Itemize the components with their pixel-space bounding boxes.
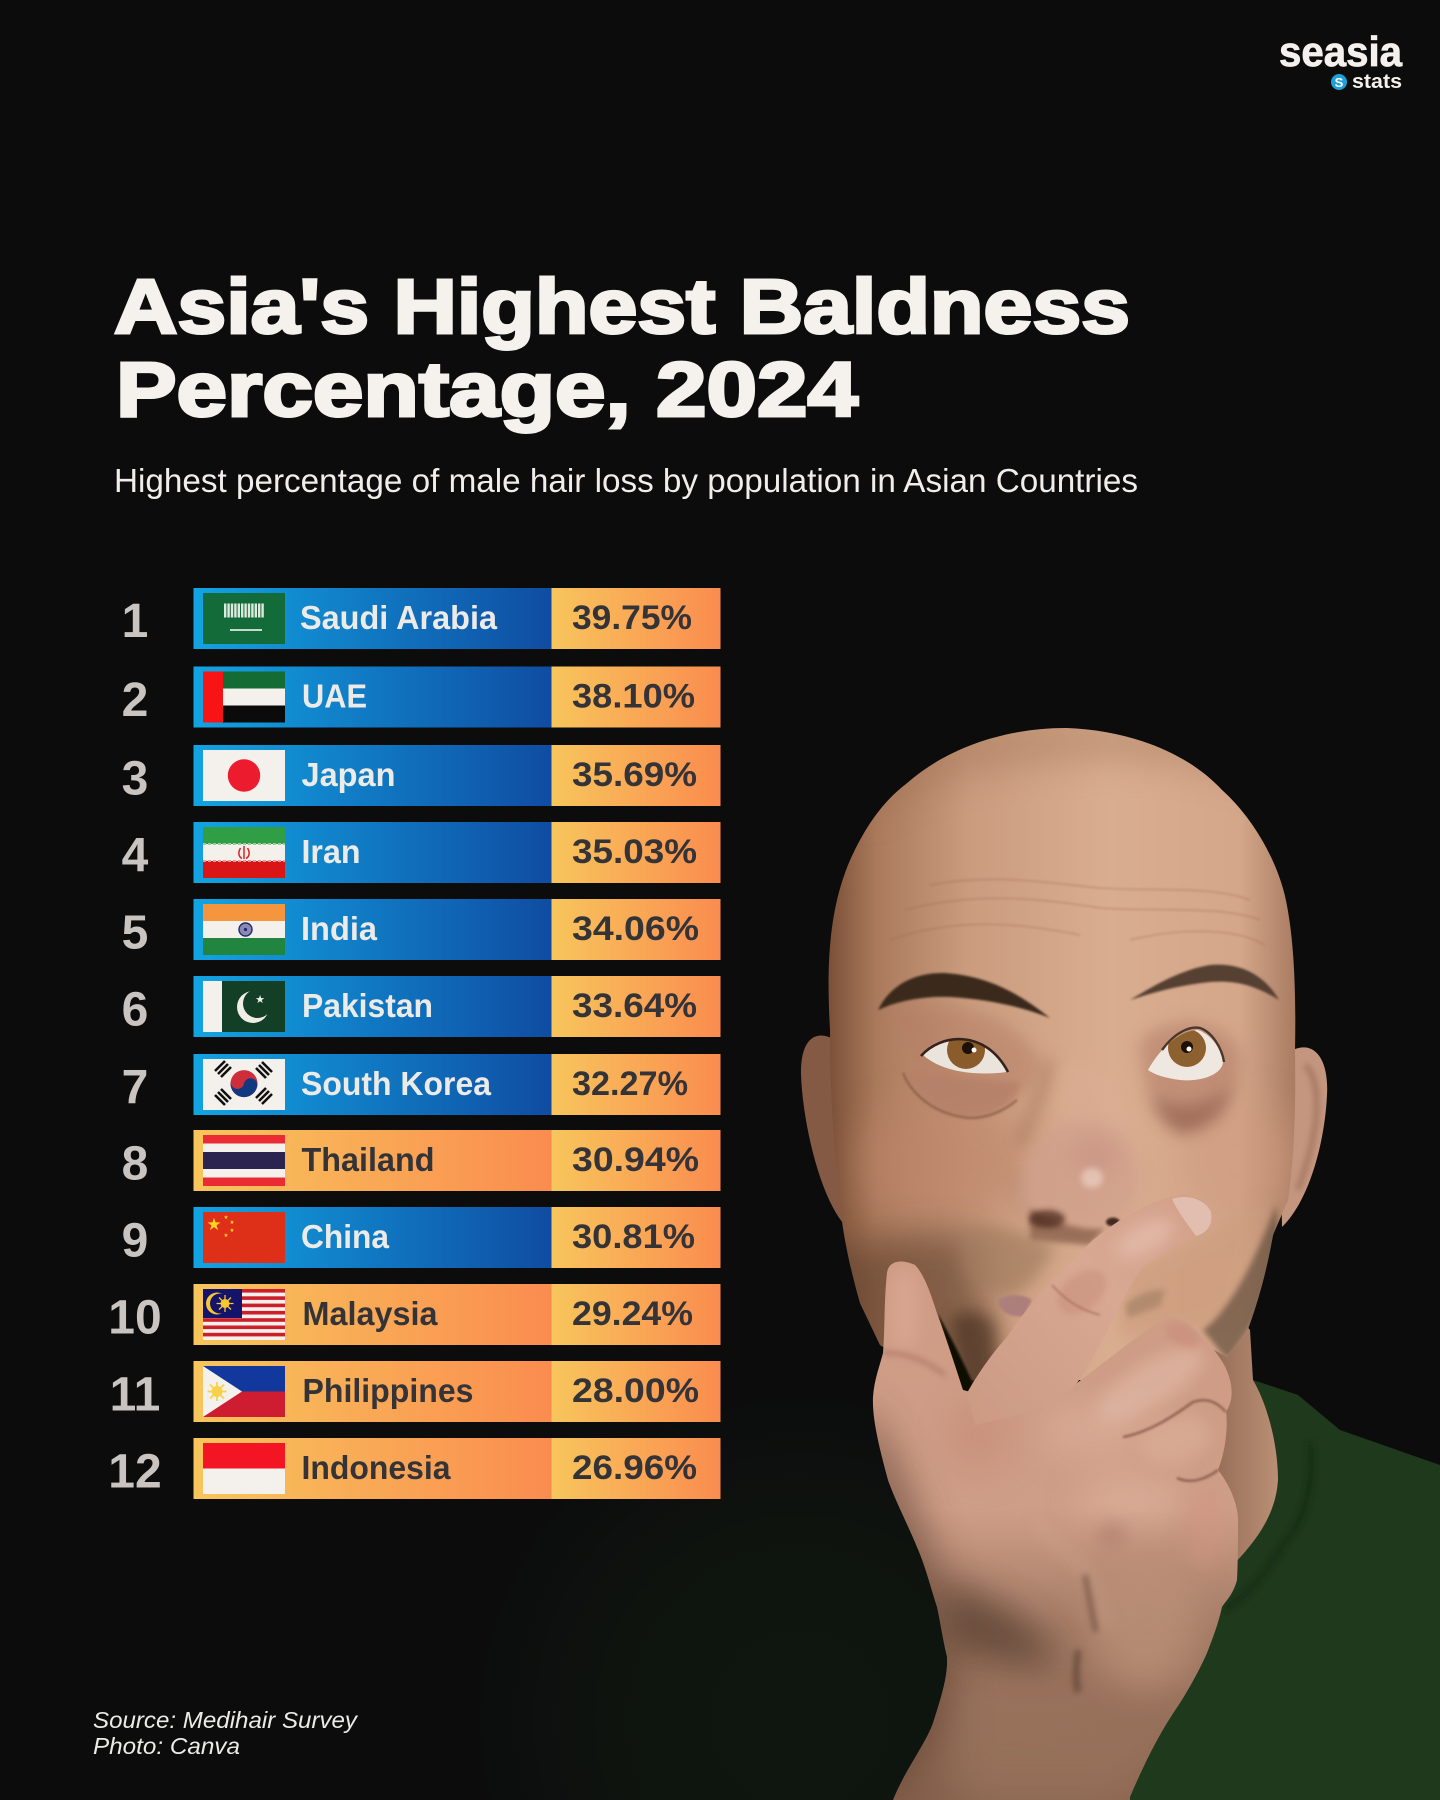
chin shadow stubble [950,1311,1000,1400]
row 11: Philippines: 11 [110,1368,160,1422]
row 3: Japan: Japan [302,756,396,793]
row 12: Indonesia: 26.96% [572,1449,697,1487]
row 8: Thailand: Thailand [302,1141,434,1178]
index finger [967,1195,1212,1425]
left cheek tone [858,1114,1026,1217]
left brow [878,973,1050,1018]
subtitle: Highest percentage of male hair loss by population in Asian Countries [114,462,1138,499]
row 6: Pakistan: 6 [122,984,148,1036]
row 7: South Korea: South Korea [301,1065,492,1102]
index knuckle [1049,1260,1115,1324]
title [114,264,1130,433]
flag: India [203,904,285,955]
source note [93,1707,359,1759]
logo: seasia stats: seasia [1279,28,1403,75]
nose left wing edge [1016,1170,1030,1218]
title: Asia's Highest Baldness [114,264,1130,350]
cheek under finger [1124,1229,1243,1332]
row 2: UAE: 2 [122,674,148,727]
nose shadow crease [1020,1060,1050,1145]
row 4: Iran [122,822,720,883]
photo: bald man looking up with hand over mouth [470,720,1440,1800]
knuckle dent [1096,1522,1128,1548]
right eye socket [1140,1022,1241,1135]
row 11: Philippines [110,1361,720,1422]
central back of hand highlight [1096,1479,1164,1525]
row 8: Thailand: 8 [122,1138,148,1190]
row 12: Indonesia [108,1438,720,1499]
flag: South Korea [203,1059,285,1110]
left ear [801,1035,850,1223]
knuckle crease [1052,1285,1100,1315]
middle finger highlight [1086,1333,1214,1437]
row 5: India: 34.06% [572,910,699,948]
flag: Pakistan: ★ [255,994,265,1006]
flag: Malaysia [203,1289,285,1340]
pinky knuckle tone [1185,1490,1225,1570]
row 9: China [122,1207,720,1268]
left eye bag line [903,1073,1017,1118]
row 7: South Korea: 32.27% [572,1065,688,1103]
stubble under finger [1125,1290,1165,1318]
flag: Thailand [203,1135,285,1186]
wrist right lighter area [1090,1550,1200,1690]
ranking table [108,588,720,1499]
lower left face in shadow [844,1214,1012,1382]
finger highlight [1110,1211,1180,1265]
nose bridge [1058,1060,1130,1140]
ring finger highlight [1134,1405,1216,1475]
upper lip stubble [960,1226,1055,1295]
right cheek tone [1269,1128,1294,1192]
row 3: Japan: 35.69% [572,756,697,794]
jaw stubble [1203,1205,1280,1360]
right eye bag dark [1150,1085,1232,1132]
forehead wrinkles [941,878,1264,944]
row 4: Iran: 4 [122,830,149,882]
nose [1021,1127,1130,1221]
row 6: Pakistan: Pakistan [302,987,433,1024]
row 8: Thailand: 30.94% [572,1141,699,1179]
logo: seasia stats: stats [1352,71,1402,93]
middle finger bottom crease [1123,1400,1226,1437]
row 5: India: India [301,910,378,947]
nose tip highlight [1081,1168,1103,1188]
vein dark lower [1076,1650,1078,1692]
ring finger bottom crease [1177,1470,1218,1481]
row 5: India: 5 [122,906,148,960]
row 4: Iran: Iran [302,833,360,870]
gap between thumb and face [937,1313,978,1395]
row 2: UAE [122,666,720,728]
flag: Philippines [203,1366,285,1417]
row 1: Saudi Arabia: 39.75% [572,599,692,637]
row 10: Malaysia [108,1284,720,1345]
left eye lid and socket [924,1010,1040,1096]
wrist left dark patch [940,1580,1060,1666]
flag: China: ★ [206,1215,222,1234]
row 1: Saudi Arabia: 1 [122,595,148,648]
flag: China: ★ [224,1232,229,1239]
row 5: India [122,899,720,960]
back of hand highlight [1061,1410,1132,1448]
row 11: Philippines: Philippines [302,1372,474,1409]
lips [998,1295,1032,1316]
row 12: Indonesia: Indonesia [302,1449,451,1486]
right nostril [1106,1218,1120,1226]
flag: China: ★ [224,1214,229,1221]
logo: seasia stats: S [1335,75,1344,90]
row 10: Malaysia: Malaysia [302,1295,438,1332]
row 7: South Korea: 7 [122,1062,148,1114]
flag: China: ★ [230,1227,235,1234]
flag: Indonesia [203,1443,285,1494]
left nostril [1029,1210,1065,1228]
left eye [920,1038,1010,1074]
wrist lower tone [900,1700,1170,1800]
flag: China: ★ [230,1219,235,1226]
row 1: Saudi Arabia: Saudi Arabia [300,599,498,636]
green shirt on right [1090,1380,1440,1800]
head [828,728,1296,1384]
shirt collar [1225,1443,1311,1610]
flag: Iran [203,827,285,878]
row 3: Japan: 3 [122,752,148,806]
row 4: Iran: 35.03% [572,833,697,871]
right eye [1148,1028,1224,1080]
row 6: Pakistan [122,976,720,1037]
row 9: China: 30.81% [572,1218,695,1256]
fingernail [1172,1197,1211,1236]
fingertip pink [1161,1317,1203,1353]
row 10: Malaysia: 10 [108,1292,162,1344]
row 9: China: China [301,1218,390,1255]
source note: Photo: Canva [93,1733,240,1759]
nose pink [1092,1154,1098,1156]
vein ridge light [1035,1520,1105,1630]
hand [860,1195,1260,1800]
source note: Source: Medihair Survey [93,1707,359,1733]
flag: Saudi Arabia [203,593,285,644]
left eye bag [934,1082,1019,1116]
row 2: UAE: 38.10% [572,678,695,716]
flag: China [203,1212,285,1263]
title: Percentage, 2024 [116,347,858,433]
top of skull shade [904,728,1208,788]
right ear [1280,1047,1327,1227]
row 2: UAE: UAE [302,678,367,714]
row 11: Philippines: 28.00% [572,1372,699,1410]
row 6: Pakistan: 33.64% [572,987,697,1025]
under nose shadow [1030,1208,1105,1245]
right brow [1130,965,1279,1000]
row 9: China: 9 [122,1214,148,1268]
left palm shadow [860,1400,960,1800]
row 7: South Korea [122,1054,720,1115]
flag: Japan [203,750,285,801]
row 12: Indonesia: 12 [108,1446,162,1498]
dark shirt shoulder on left [470,1390,1130,1800]
pink knuckle at index base [958,1413,996,1457]
flag: Pakistan [203,981,285,1032]
vein dark upper [1085,1575,1096,1632]
row 10: Malaysia: 29.24% [572,1295,693,1333]
thumb crease [883,1353,945,1375]
row 1: Saudi Arabia [122,588,720,649]
row 3: Japan [122,745,720,806]
thumb highlight [896,1282,914,1338]
neck [1100,1300,1278,1565]
flag: UAE [203,672,285,722]
row 8: Thailand [122,1130,720,1191]
